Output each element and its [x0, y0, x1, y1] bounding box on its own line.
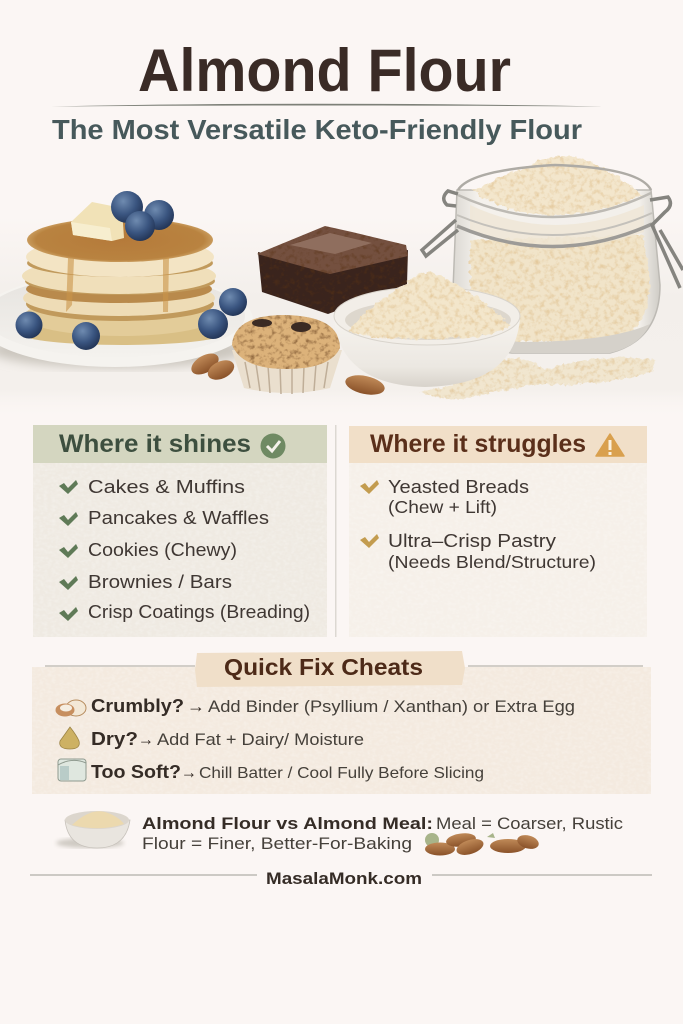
list: struggles items: Yeasted Breads [388, 476, 529, 497]
row: crumbly: Add Binder (Psyllium / Xanthan) or Extra Egg [208, 698, 575, 716]
row: dry: Add Fat + Dairy/ Moisture [157, 731, 364, 749]
brownie [257, 226, 408, 314]
blueberries [16, 191, 247, 350]
list: struggles items [360, 476, 596, 572]
list: shines items [59, 476, 310, 622]
panel: where it struggles [349, 426, 647, 637]
plate with pancakes [0, 191, 253, 368]
list: struggles items: (Needs Blend/Structure) [388, 552, 596, 572]
text block: almond flour vs meal [142, 814, 624, 853]
subtitle: The Most Versatile Keto-Friendly Flour [52, 114, 582, 145]
panel header: struggles [349, 426, 647, 463]
butter [71, 202, 124, 241]
text block: almond flour vs meal: Meal = Coarser, Rustic [436, 814, 624, 833]
banner: quick fix cheats: Quick Fix Cheats [224, 654, 423, 680]
text block: almond flour vs meal: Flour = Finer, Better-For-Baking [142, 834, 412, 853]
panel: where it shines [33, 425, 327, 637]
list: struggles items: Ultra–Crisp Pastry [388, 530, 557, 551]
row: dry: Dry? [91, 728, 138, 749]
icon: almonds/egg [56, 700, 86, 716]
muffin [232, 315, 342, 394]
text block: almond flour vs meal: Almond Flour vs Almond Meal: [142, 814, 433, 833]
icon: warning triangle [596, 434, 624, 456]
list: shines items: Cakes & Muffins [88, 476, 245, 497]
heading: where it struggles: Where it struggles [370, 430, 586, 458]
food photo scene [0, 156, 683, 420]
icon: green check badge [260, 434, 286, 458]
spilled flour [420, 358, 655, 399]
bowl of flour [334, 273, 520, 387]
row: crumbly [56, 695, 575, 716]
banner: quick fix cheats [195, 651, 465, 687]
title: Almond Flour [138, 37, 511, 104]
list: shines items: Crisp Coatings (Breading) [88, 601, 310, 622]
list: shines items: Pancakes & Waffles [88, 507, 269, 528]
icon: almonds [425, 831, 540, 858]
footer: website: MasalaMonk.com [266, 869, 422, 888]
row: too soft: Chill Batter / Cool Fully Before Slicing [199, 765, 484, 782]
row: too soft: Too Soft? [91, 761, 181, 782]
row: crumbly: Crumbly? [91, 695, 184, 716]
row: too soft: → [181, 762, 197, 782]
jar clamp left [422, 191, 458, 256]
row: dry: → [138, 729, 154, 749]
jar of almond flour [422, 156, 683, 353]
list: shines items: Brownies / Bars [88, 571, 232, 592]
icon: oil drop [60, 727, 79, 749]
row: crumbly: → [187, 696, 205, 716]
jar clamp right [650, 197, 683, 288]
title rule [51, 104, 604, 106]
pancake layers [22, 218, 218, 336]
list: shines items: Cookies (Chewy) [88, 539, 237, 560]
icon: ice cube [58, 759, 86, 781]
icon: small bowl of flour [56, 811, 130, 848]
heading: where it shines: Where it shines [59, 430, 251, 458]
almonds on table [188, 349, 386, 398]
list: struggles items: (Chew + Lift) [388, 497, 497, 517]
panel: quick fix cheats [32, 651, 651, 794]
row: too soft [58, 759, 484, 782]
panel header: shines [33, 425, 327, 463]
row: dry [60, 727, 364, 749]
